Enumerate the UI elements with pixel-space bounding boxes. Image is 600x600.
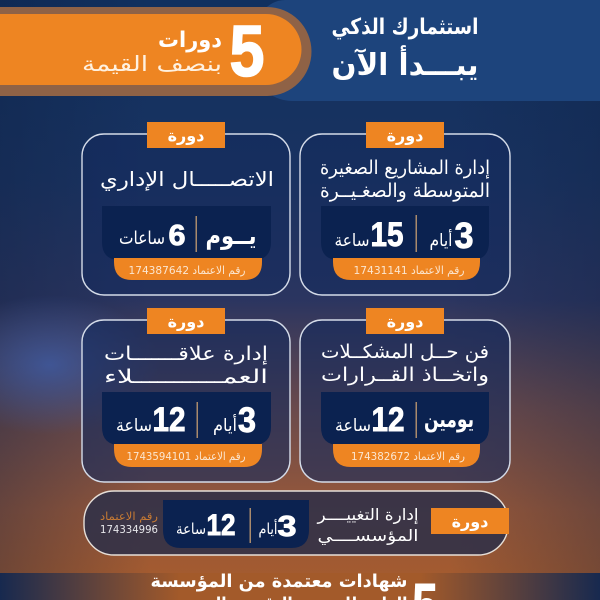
duration box	[163, 500, 309, 548]
course title	[321, 341, 489, 386]
duration box: 12	[206, 509, 236, 542]
course title: المؤسســــي	[318, 526, 418, 546]
duration box: 6	[168, 220, 186, 252]
tag: دورة	[387, 126, 423, 145]
course title: واتخــاذ القــرارات	[321, 364, 489, 386]
duration box: ساعات	[119, 228, 165, 249]
accreditation number: رقم الاعتماد 17431141	[354, 264, 464, 277]
panel: course customer relations	[82, 308, 290, 482]
duration box: 12	[152, 401, 186, 439]
header title: استثمارك الذكي	[332, 15, 478, 40]
panel: course change management	[84, 491, 509, 555]
duration box: ساعة	[334, 231, 370, 251]
duration box: يــوم	[206, 222, 256, 250]
course title	[316, 505, 418, 546]
duration box: أيام	[213, 414, 237, 436]
offer number: 5	[230, 12, 264, 92]
accreditation number: رقم الاعتماد	[100, 510, 158, 523]
duration box: أيام	[258, 519, 278, 538]
course title: المتوسطة والصغـيــرة	[320, 180, 490, 202]
duration box: 12	[372, 401, 404, 439]
course title: إدارة المشاريع الصغيرة	[320, 157, 490, 180]
tag	[431, 508, 509, 534]
accreditation number: رقم الاعتماد 174387642	[128, 264, 246, 277]
course title	[104, 343, 268, 388]
header panel: smart investment	[262, 0, 600, 101]
offer text	[82, 28, 222, 76]
duration box: 3	[278, 511, 296, 543]
course title: العمـــــــــــلاء	[104, 366, 268, 388]
tag: دورة	[168, 126, 204, 145]
duration box	[321, 206, 489, 260]
course title: الاتصـــــال الإداري	[100, 167, 274, 192]
tag: دورة	[387, 312, 423, 331]
header title	[332, 15, 478, 83]
accreditation number	[333, 258, 480, 280]
accreditation number	[100, 510, 158, 536]
accreditation number: رقم الاعتماد 1743594101	[126, 450, 246, 463]
course title: فن حــل المشكــلات	[321, 341, 489, 363]
duration box: أيام	[430, 229, 452, 251]
course title	[320, 157, 490, 202]
duration box: ساعة	[116, 416, 152, 436]
footer text: شهادات معتمدة من المؤسسة	[150, 571, 408, 592]
course title: إدارة التغييــــر	[316, 505, 418, 525]
tag: دورة	[168, 312, 204, 331]
tag: دورة	[452, 512, 488, 531]
accreditation number: 174334996	[100, 523, 158, 536]
duration box: ساعة	[335, 416, 371, 436]
footer band: five certificates	[0, 570, 600, 600]
duration box	[102, 392, 271, 445]
duration box: ساعة	[176, 520, 206, 538]
accreditation number	[114, 258, 262, 280]
tag	[147, 122, 225, 148]
orange offer pill	[0, 7, 312, 96]
duration box: يومين	[424, 407, 474, 433]
accreditation number	[114, 444, 262, 467]
duration box	[321, 392, 489, 445]
accreditation number	[333, 444, 480, 467]
duration box: 3	[238, 401, 256, 440]
tag	[147, 308, 225, 334]
accreditation number: رقم الاعتماد 174382672	[351, 450, 465, 463]
offer text: دورات	[158, 28, 222, 53]
panel: course problem solving	[300, 308, 510, 482]
offer text: بنصف القيمة	[82, 52, 222, 76]
panel: course communication	[82, 122, 290, 295]
tag	[366, 122, 444, 148]
duration box: 3	[454, 215, 474, 256]
duration box: 15	[370, 216, 404, 254]
panel: course project management	[300, 122, 510, 295]
duration box	[102, 206, 271, 260]
header title: يبـــدأ الآن	[332, 45, 478, 83]
tag	[366, 308, 444, 334]
course title: إدارة علاقـــــــات	[104, 343, 268, 366]
